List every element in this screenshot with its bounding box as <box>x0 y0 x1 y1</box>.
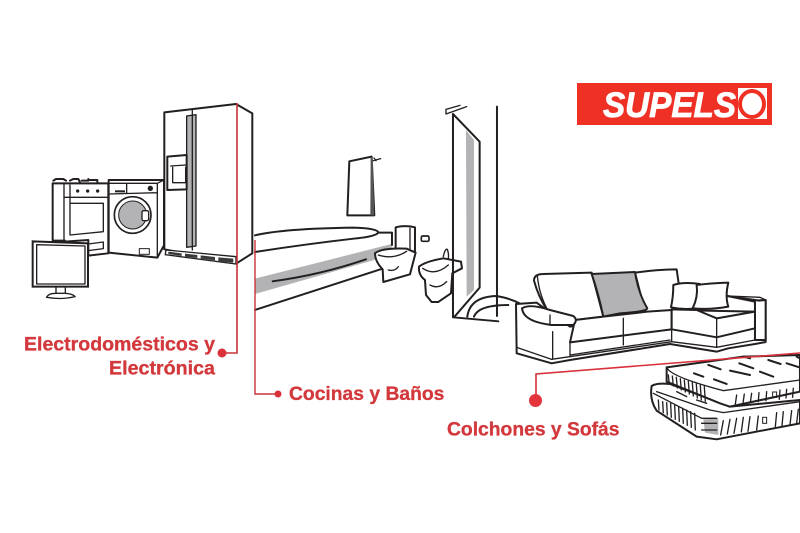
marker: bathrooms <box>274 390 282 398</box>
illustration: kitchen appliances and electronics <box>33 104 252 298</box>
label: Electrodomésticos y Electrónica: Electrónica <box>109 358 215 380</box>
marker: furniture <box>529 394 542 407</box>
icon: lower mattress <box>651 384 800 439</box>
icon: oven <box>53 179 108 256</box>
label: Electrodomésticos y Electrónica: Electrodomésticos y <box>24 334 215 356</box>
label: Cocinas y Baños: Cocinas y Baños <box>289 384 444 405</box>
left back cushion <box>534 273 603 320</box>
icon: sofa <box>516 269 766 363</box>
connector: furniture <box>536 353 800 398</box>
icon: bidet <box>419 249 462 302</box>
illustration: bathroom <box>255 105 519 321</box>
marker: appliances <box>218 348 226 358</box>
connector: appliances <box>220 103 237 353</box>
logo: Supelso <box>577 83 772 125</box>
icon: refrigerator <box>164 104 252 264</box>
label: Electrodomésticos y Electrónica <box>24 334 215 380</box>
right back cushion <box>635 269 679 312</box>
chaise seat <box>672 309 755 337</box>
gray back cushion <box>592 272 647 317</box>
armrest bolster <box>522 306 576 325</box>
throw pillows <box>671 283 700 309</box>
icon: washing machine <box>109 180 164 258</box>
right arm <box>727 296 766 340</box>
icon: monitor <box>33 241 88 298</box>
icon: toilet <box>375 226 416 282</box>
connector: bathrooms <box>255 240 278 394</box>
icon: bathtub <box>255 228 392 310</box>
icon: mirror <box>347 157 381 215</box>
illustration: furniture <box>516 269 800 439</box>
base and plinth <box>516 300 766 363</box>
icon: upper mattress <box>667 355 800 407</box>
icon: toilet paper <box>421 236 429 241</box>
logo: Supelso: SUPELS <box>603 86 736 125</box>
label: Colchones y Sofás: Colchones y Sofás <box>447 420 620 440</box>
seat cushions <box>570 310 672 342</box>
icon: shower <box>446 105 519 321</box>
